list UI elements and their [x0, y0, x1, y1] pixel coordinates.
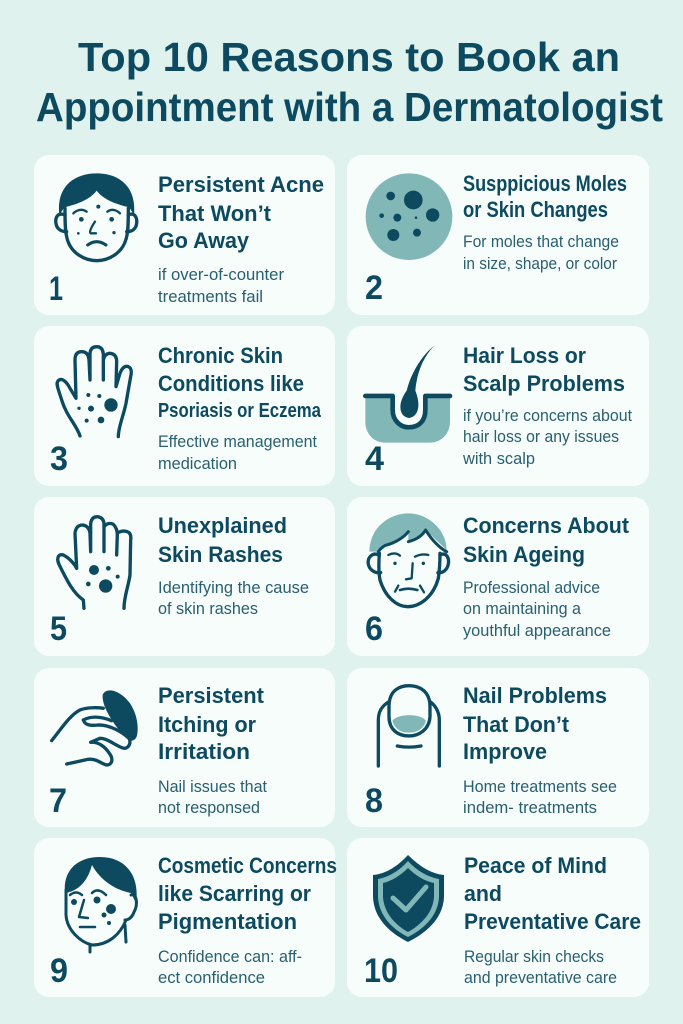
- number 4: 4: [365, 440, 384, 478]
- heading 4: [463, 343, 625, 396]
- icon: moles on skin: [366, 173, 452, 260]
- number 2: 2: [365, 269, 383, 307]
- panel: reason 7: [34, 668, 335, 827]
- number 3: 3: [50, 440, 68, 478]
- panel: reason 6: [347, 497, 649, 656]
- description 1: treatments fail: [158, 288, 263, 306]
- heading 9: Cosmetic Concerns: [158, 853, 337, 878]
- heading 5: Skin Rashes: [158, 542, 283, 567]
- description 8: Home treatments see: [463, 778, 617, 796]
- heading 3: Chronic Skin: [158, 343, 283, 368]
- heading 10: Preventative Care: [464, 909, 641, 934]
- heading 4: Hair Loss or: [463, 343, 586, 368]
- panel: reason 3: [34, 326, 335, 486]
- icon: face with acne: [56, 173, 137, 261]
- heading 1: That Won’t: [158, 201, 271, 226]
- description 4: [462, 407, 632, 468]
- description 5: Identifying the cause: [158, 579, 309, 597]
- icon: shield with check: [373, 855, 444, 942]
- heading 2: [463, 171, 627, 222]
- heading 3: Conditions like: [158, 371, 304, 396]
- description 6: Professional advice: [463, 579, 600, 597]
- heading 10: and: [464, 881, 502, 906]
- icon: face with scars and pigmentation: [65, 857, 137, 952]
- description 7: Nail issues that: [158, 778, 267, 796]
- description 2: in size, shape, or color: [463, 255, 617, 273]
- icon: ageing face: [368, 513, 449, 607]
- number 10: 10: [364, 952, 398, 990]
- heading 8: [463, 683, 607, 764]
- heading 7: Persistent: [158, 683, 264, 708]
- heading 6: Skin Ageing: [463, 542, 585, 567]
- heading 7: [158, 683, 264, 764]
- description 4: hair loss or any issues: [463, 428, 619, 446]
- description 5: of skin rashes: [158, 600, 258, 618]
- description 9: Confidence can: aff-: [158, 948, 302, 966]
- heading 8: Nail Problems: [463, 683, 607, 708]
- description 3: [158, 433, 317, 473]
- heading 7: Itching or: [158, 712, 256, 737]
- description 10: [464, 948, 617, 987]
- description 3: Effective management: [158, 433, 317, 451]
- heading 5: [158, 513, 287, 567]
- heading 2: Susppicious Moles: [463, 171, 627, 196]
- heading 10: Peace of Mind: [464, 853, 607, 878]
- heading 1: Go Away: [158, 228, 249, 253]
- description 1: if over-of-counter: [158, 266, 285, 284]
- description 4: with scalp: [462, 450, 535, 468]
- heading 1: Persistent Acne: [158, 172, 324, 197]
- heading 5: Unexplained: [158, 513, 287, 538]
- heading 3: Psoriasis or Eczema: [158, 400, 322, 422]
- description 1: [158, 266, 285, 306]
- heading 2: or Skin Changes: [463, 197, 608, 222]
- title: [36, 34, 663, 130]
- description 8: [463, 778, 617, 817]
- description 2: [463, 233, 619, 273]
- icon: hand with eczema spots: [57, 347, 131, 437]
- description 9: [158, 948, 302, 987]
- description 6: youthful appearance: [463, 622, 611, 640]
- heading 3: [158, 343, 322, 422]
- description 8: indem- treatments: [463, 799, 597, 817]
- icon: hair follicle: [365, 346, 450, 443]
- panel: reason 9: [34, 838, 337, 997]
- number 5: 5: [50, 610, 67, 648]
- panel: reason 8: [347, 668, 649, 827]
- description 2: For moles that change: [463, 233, 619, 251]
- icon: hand with rash: [58, 517, 131, 608]
- description 6: on maintaining a: [463, 600, 582, 618]
- icon: fingernail: [378, 686, 439, 766]
- description 3: medication: [158, 455, 237, 473]
- number 6: 6: [365, 610, 383, 648]
- panel: reason 1: [34, 155, 335, 315]
- title: Top 10 Reasons to Book an: [78, 34, 620, 80]
- heading 9: Pigmentation: [158, 909, 297, 934]
- number 1: 1: [49, 270, 63, 308]
- heading 6: [463, 513, 629, 567]
- heading 8: That Don’t: [463, 712, 569, 737]
- number 9: 9: [50, 952, 68, 990]
- icon: hand scratching skin: [52, 690, 138, 765]
- heading 6: Concerns About: [463, 513, 629, 538]
- heading 9: like Scarring or: [158, 881, 311, 906]
- panel: reason 5: [34, 497, 335, 656]
- panel: reason 4: [347, 326, 649, 486]
- description 7: [158, 778, 267, 817]
- heading 7: Irritation: [158, 739, 250, 764]
- number 8: 8: [365, 782, 383, 820]
- description 9: ect confidence: [158, 969, 265, 987]
- panel: reason 10: [347, 838, 649, 997]
- heading 9: [158, 853, 337, 934]
- description 6: [463, 579, 611, 640]
- description 10: and preventative care: [464, 969, 617, 987]
- heading 10: [464, 853, 641, 934]
- number 7: 7: [49, 782, 67, 820]
- panel: reason 2: [347, 155, 649, 315]
- description 10: Regular skin checks: [464, 948, 604, 966]
- heading 1: [158, 172, 324, 253]
- description 5: [158, 579, 309, 618]
- description 4: if you’re concerns about: [463, 407, 632, 425]
- description 7: not responsed: [158, 799, 260, 817]
- heading 4: Scalp Problems: [463, 371, 625, 396]
- heading 8: Improve: [463, 739, 547, 764]
